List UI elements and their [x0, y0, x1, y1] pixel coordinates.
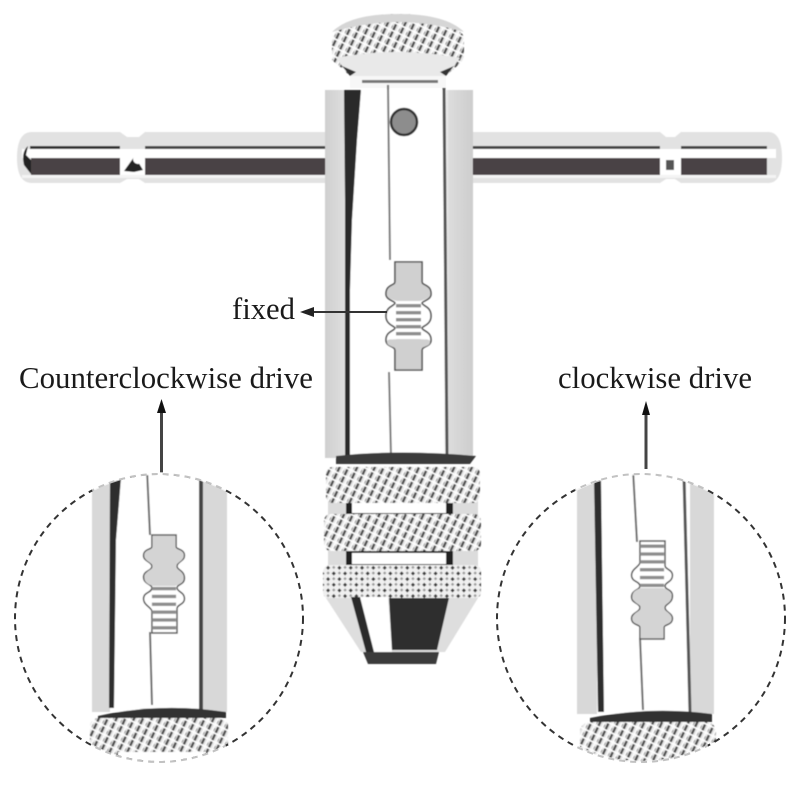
locking pin hole [391, 109, 417, 135]
three knurled collars and chuck [323, 467, 481, 664]
left handle bar [17, 132, 332, 183]
label: counterclockwise drive: Counterclockwise drive [19, 360, 313, 395]
label: fixed: fixed [232, 291, 295, 326]
arrow: counterclockwise pointer [157, 399, 166, 473]
detail circle: counterclockwise drive [15, 470, 303, 764]
dashed ring right [497, 474, 785, 762]
right handle bar [470, 132, 782, 183]
slot: fixed position [386, 262, 431, 370]
dashed ring left [15, 473, 303, 763]
main tube body [325, 85, 476, 464]
arrow: clockwise pointer [642, 401, 650, 469]
top knurled knob [332, 14, 464, 88]
label: clockwise drive: clockwise drive [558, 360, 752, 395]
arrow: fixed pointer [300, 307, 387, 317]
detail circle: clockwise drive [497, 470, 785, 762]
